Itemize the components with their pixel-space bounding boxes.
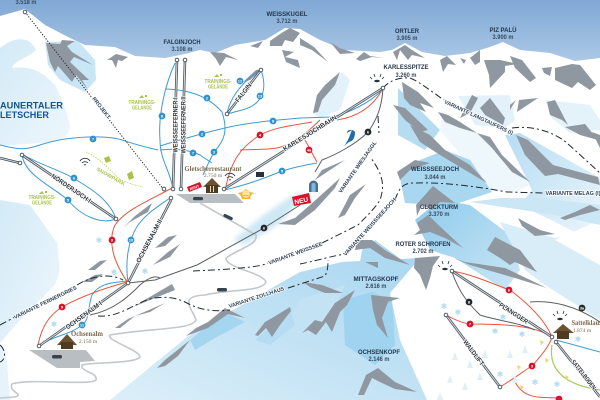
- training area and snowpark labels: TRAININGS-: [28, 195, 56, 201]
- training area and snowpark labels: GELÄNDE: [132, 104, 153, 112]
- variant labels: VARIANTE WEISSSEE: [268, 241, 324, 267]
- project line: [25, 12, 164, 190]
- ski mascot blue: [344, 130, 355, 146]
- lift names: PLANGGER: [498, 302, 529, 326]
- car icon: [193, 197, 203, 200]
- glacier title: AUNERTALER: [0, 100, 63, 110]
- piste number markers: 3: [531, 364, 534, 368]
- lift names: [50, 82, 597, 392]
- green training route: [86, 152, 143, 187]
- peak labels: OCHSENKOPF: [358, 349, 400, 356]
- peak labels: 3.905 m: [396, 36, 418, 42]
- piste number markers: 6: [263, 226, 266, 230]
- trees pale: [437, 345, 528, 400]
- lift names: WEISSSEEFERNER I: [172, 97, 179, 152]
- variant labels: VARIANTE MELAG (I): [546, 191, 600, 197]
- black pistes: [90, 88, 600, 330]
- Ochsenalm hut and label: [57, 330, 103, 349]
- green toboggan route: [551, 345, 600, 390]
- piste number markers: 7: [92, 136, 95, 142]
- glacier shading: left: [0, 39, 96, 400]
- peak labels: [16, 0, 517, 363]
- piste number markers: 8: [161, 114, 164, 118]
- variant labels: PROJEKT: [90, 96, 112, 121]
- snowflakes: ❄: [519, 330, 525, 339]
- snowflakes: ❄: [532, 378, 538, 387]
- training area and snowpark labels: GELÄNDE: [32, 200, 53, 206]
- viewpoint icons: [370, 74, 567, 320]
- glacier shading: central and right faces: [313, 72, 600, 320]
- tunnel: [309, 180, 318, 192]
- snowflakes: ❄: [492, 327, 498, 336]
- snowflakes: [51, 236, 581, 389]
- peak labels: 3.518 m: [16, 0, 36, 6]
- peak labels: KARLESSPITZE: [384, 64, 429, 71]
- restaurant: Gletscherrestaurant: Gletscherrestaurant: [184, 165, 242, 173]
- piste number markers: 3a: [580, 306, 585, 310]
- lift names: KARLESJOCHBAHN: [282, 114, 339, 153]
- red rent badge: RENT: [189, 184, 200, 191]
- car icon lower road: [217, 288, 227, 292]
- restaurant: Gletscherrestaurant: 2.750 m: [204, 173, 223, 179]
- piste number markers: 8: [468, 300, 471, 304]
- access road: [0, 203, 266, 398]
- parking: Gletscherrestaurant: [176, 194, 244, 203]
- red pistes: [38, 90, 560, 398]
- snowflakes: ❄: [142, 267, 148, 276]
- Sattelklause hut and label: [553, 319, 600, 339]
- snowflakes: ❄: [497, 370, 503, 379]
- glacier title: [0, 100, 63, 120]
- peak labels: 3.370 m: [428, 212, 450, 218]
- glacier shading: lower slopes: [110, 192, 427, 400]
- peak labels: 3.712 m: [276, 19, 298, 25]
- lift names: NÖRDERJOCH I: [50, 171, 93, 205]
- peak labels: FALGINJOCH: [164, 39, 201, 46]
- snowflakes: ❄: [96, 236, 102, 245]
- snowflakes: ❄: [441, 302, 447, 311]
- piste number markers: 10: [129, 238, 134, 242]
- piste number markers: 9: [111, 238, 114, 242]
- piste number markers: 5: [67, 198, 70, 202]
- piste number markers: 8: [272, 118, 275, 124]
- peak labels: WEISSSEEJOCH: [411, 166, 459, 173]
- lift names: OCHSENALM II: [135, 218, 164, 264]
- piste number markers: 12: [238, 78, 243, 84]
- Ochsenalm hut and label: Ochsenalm: [71, 330, 103, 338]
- piste number markers: 6: [367, 130, 370, 134]
- training area and snowpark labels: [28, 74, 232, 206]
- peak labels: ROTER SCHROFEN: [396, 241, 451, 248]
- peak labels: 3.108 m: [172, 47, 192, 53]
- snowflakes: ❄: [51, 320, 57, 329]
- training area and snowpark labels: SNOWPARK: [95, 167, 126, 188]
- peak labels: 3.900 m: [492, 35, 514, 41]
- piste number markers: 7: [192, 150, 195, 156]
- piste number markers: 2: [206, 96, 209, 100]
- snowflakes: ❄: [500, 313, 506, 322]
- variant labels: VARIANTE WIESJAGGL: [338, 140, 379, 195]
- lift names: WALDLIFT: [461, 339, 485, 367]
- peak labels: WEISSKUGEL: [266, 11, 308, 18]
- peak labels: 3.044 m: [424, 175, 446, 181]
- restaurant: Gletscherrestaurant: [184, 165, 242, 193]
- new badge: [292, 193, 311, 206]
- peak labels: GLOCKTURM: [420, 204, 458, 211]
- training area and snowpark labels: GELÄNDE: [208, 84, 229, 90]
- snowflakes: ❄: [554, 380, 560, 389]
- peak labels: 3.260 m: [396, 73, 416, 79]
- sky background: [0, 0, 600, 70]
- blue pistes: [0, 63, 600, 352]
- piste number markers: 4a: [307, 148, 312, 152]
- training area and snowpark labels: TRAININGS-: [204, 79, 232, 85]
- peak labels: 2.146 m: [368, 357, 390, 363]
- lift names: OCHSENALM I: [65, 300, 104, 331]
- snowflakes: ❄: [111, 268, 117, 277]
- piste number markers: 9: [61, 304, 64, 310]
- piste number markers: 7: [469, 322, 472, 326]
- variant labels: VARIANTE FERNERGRIES: [13, 285, 78, 321]
- smiley mascot: [238, 189, 254, 199]
- peak labels: MITTAGSKOPF: [354, 276, 398, 283]
- piste number markers: 13: [258, 94, 263, 98]
- piste number markers: 2: [201, 132, 204, 136]
- Ochsenalm parking: [29, 350, 95, 368]
- car icon on road: [223, 213, 233, 221]
- wifi icons: [80, 158, 235, 180]
- variant labels: [13, 96, 600, 321]
- piste number markers: 6: [508, 288, 511, 292]
- car at Ochsenalm: [52, 355, 62, 358]
- piste number markers: [59, 78, 585, 400]
- peak labels: 2.616 m: [366, 284, 386, 290]
- snowflakes: ❄: [455, 308, 461, 317]
- new badge: NEU: [294, 196, 309, 206]
- snowflakes: ❄: [575, 335, 581, 344]
- peak labels: 2.702 m: [412, 249, 434, 255]
- variant labels: VARIANTE WEISSSEEJOCH: [343, 197, 398, 258]
- snow cannons: [517, 340, 569, 390]
- peak labels: PIZ PALÜ: [490, 25, 517, 34]
- variant labels: VARIANTE LANGTAUFERS (I): [443, 100, 514, 137]
- Ochsenalm hut and label: 2.150 m: [79, 339, 98, 345]
- piste number markers: 6: [73, 176, 76, 180]
- piste number markers: 4: [259, 132, 262, 138]
- training area and snowpark labels: TRAININGS-: [128, 100, 156, 106]
- piste number markers: 3: [213, 150, 216, 154]
- Sattelklause hut and label: 1.874 m: [573, 328, 592, 334]
- lift names: WEISSSEEFERNER II: [180, 96, 187, 154]
- gondola icon: [256, 172, 264, 177]
- glacier title: LETSCHER: [0, 110, 49, 120]
- variant labels: VARIANTE ZOLLHAUS: [228, 286, 286, 310]
- lift names: FALGIN: [234, 82, 254, 104]
- peak labels: ORTLER: [395, 28, 419, 35]
- piste number markers: 11: [80, 322, 85, 328]
- piste number markers: 5: [281, 168, 284, 174]
- red rent badge: [187, 182, 202, 192]
- variant dashed routes: [0, 78, 600, 362]
